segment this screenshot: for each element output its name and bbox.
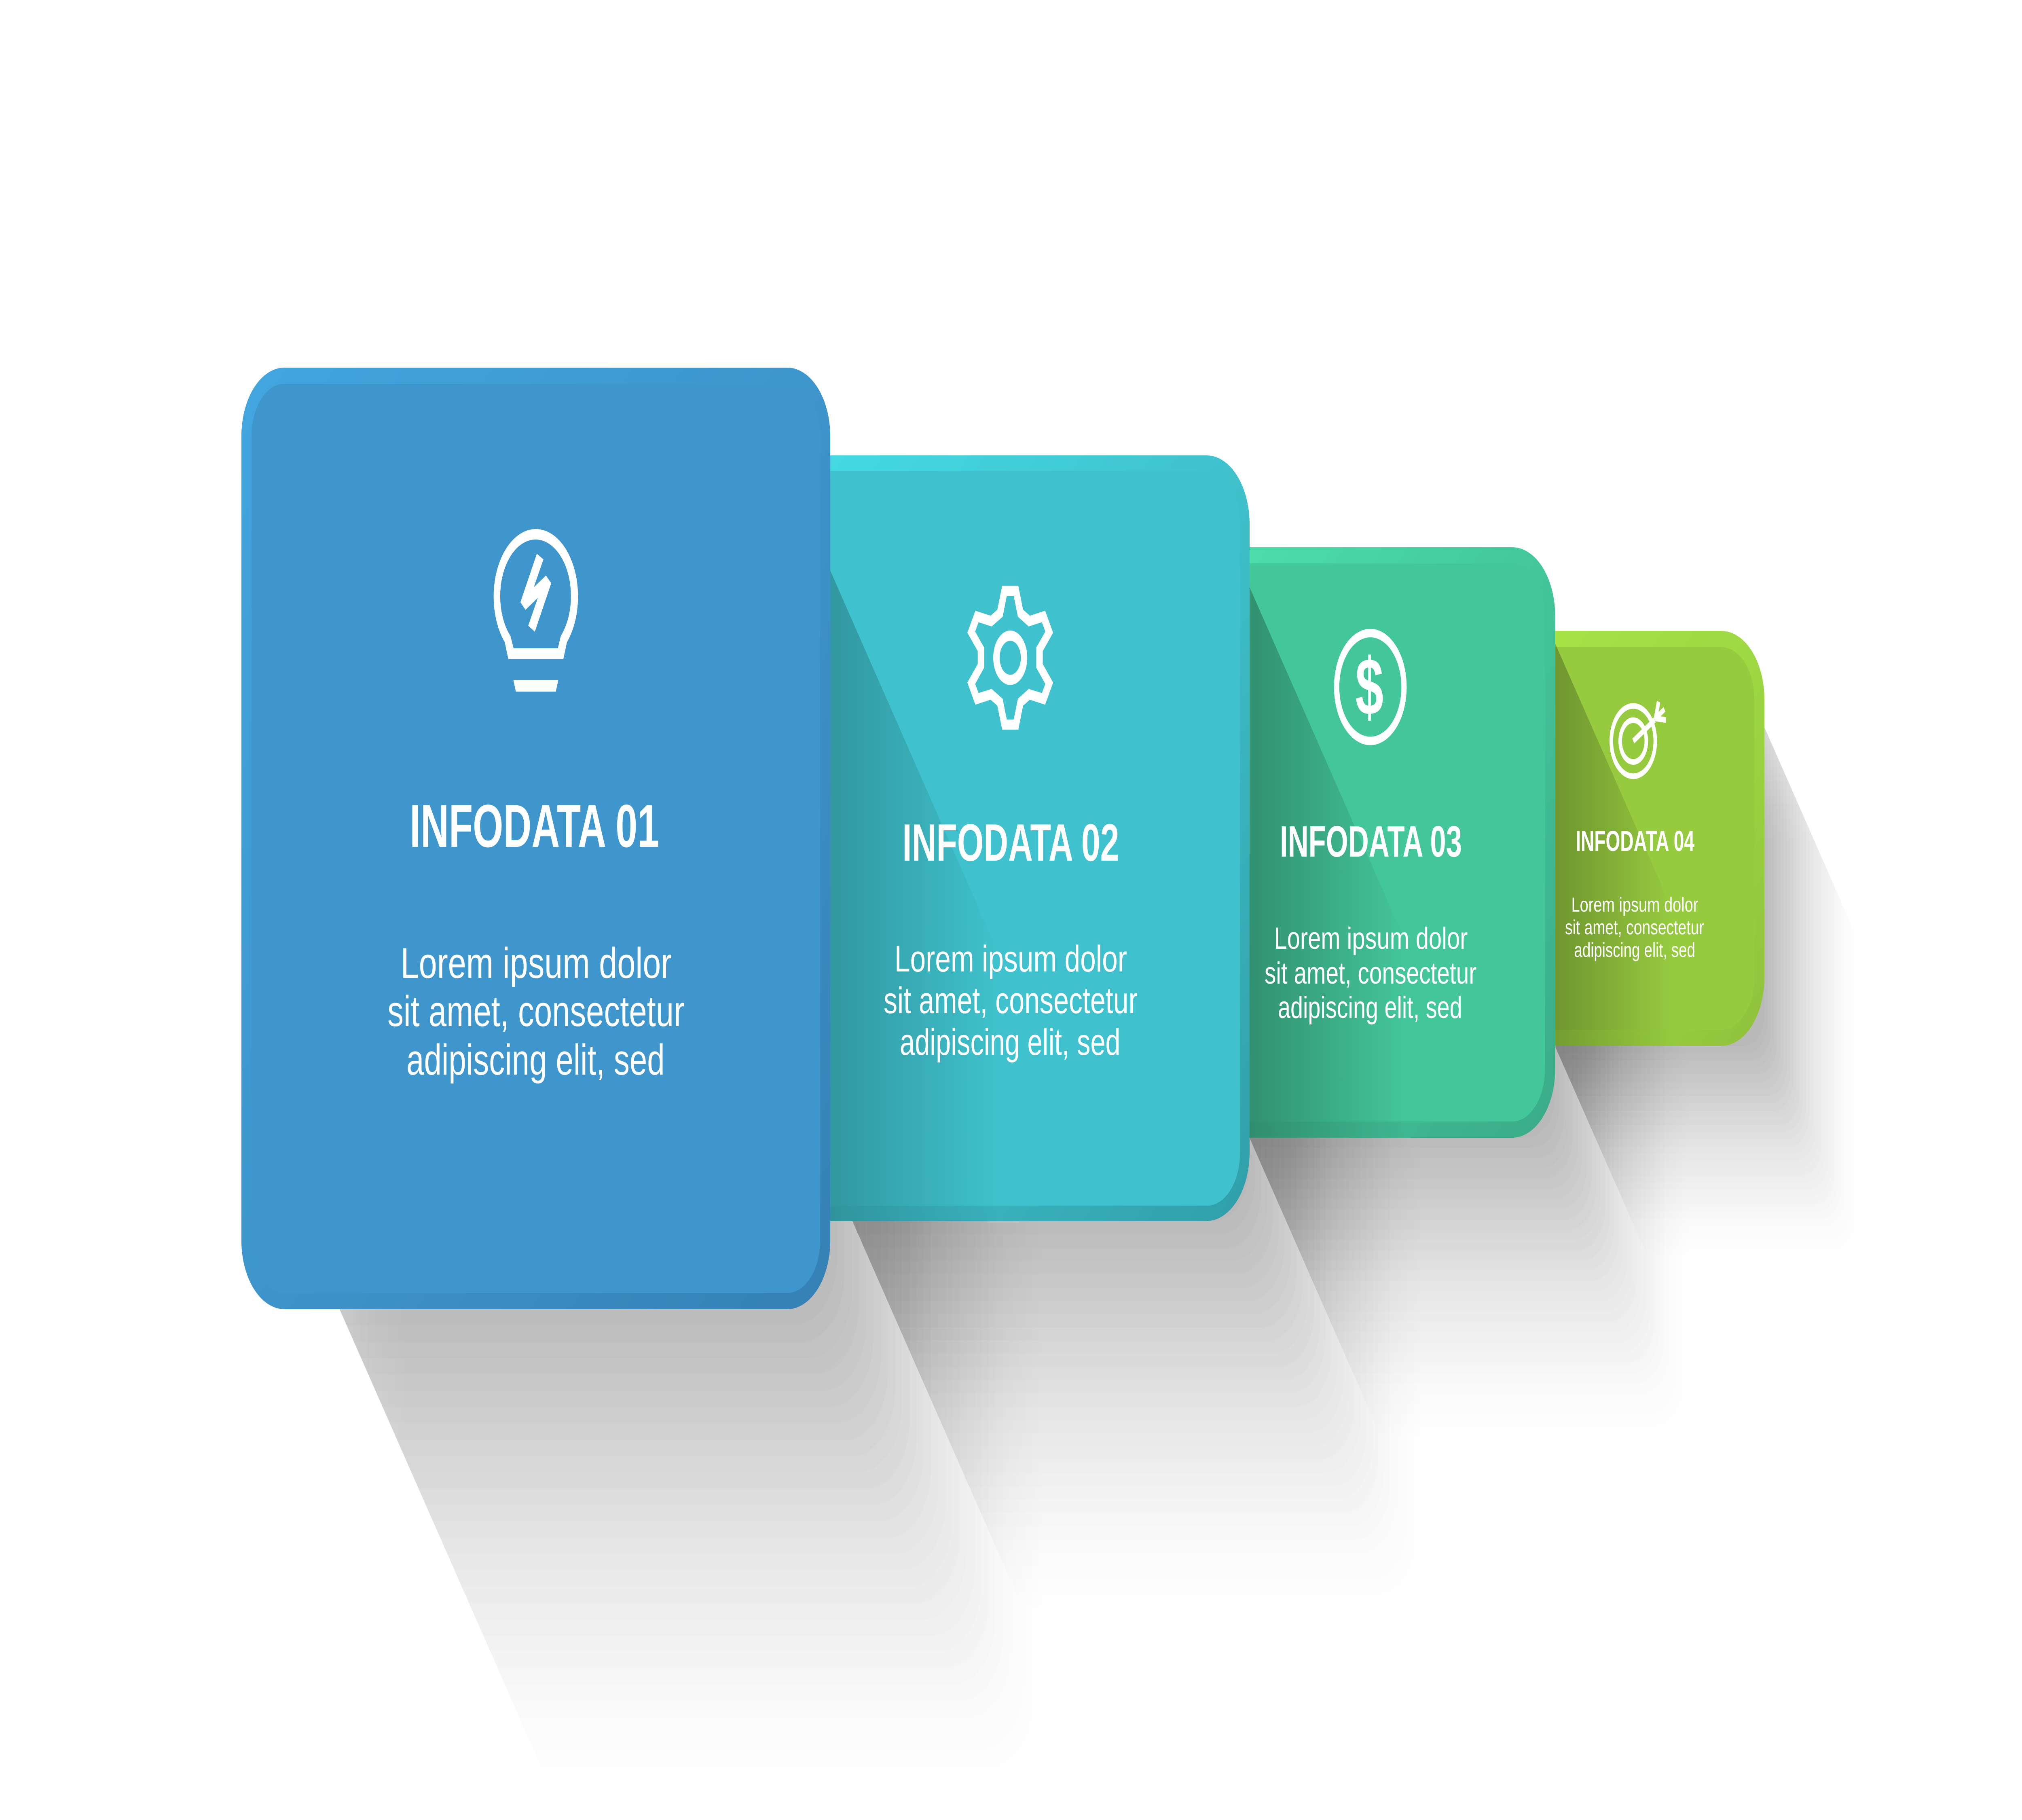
text block: card 3 body: Lorem ipsum dolor	[1274, 922, 1468, 956]
icon: dollar coin	[1337, 633, 1404, 741]
heading: infodata 01: INFODATA 01	[410, 792, 659, 860]
long shadow: card 4	[1555, 727, 1838, 1211]
icon: target with arrow	[1611, 701, 1666, 776]
long shadow: card 3	[1250, 1046, 1659, 1373]
text block: card 1 body: sit amet, consectetur	[387, 987, 684, 1035]
panel: card 2	[771, 455, 1250, 1221]
text block: card 1 body	[387, 939, 684, 1084]
text block: card 3 body: sit amet, consectetur	[1265, 957, 1476, 990]
card 3 face	[1195, 563, 1545, 1122]
text block: card 4 body	[1565, 893, 1704, 961]
cast shadow from card 3	[1555, 643, 1732, 1046]
cast shadow from card 1	[830, 571, 1117, 1221]
panel: card 4	[1504, 631, 1764, 1046]
text block: card 2 body	[884, 938, 1138, 1063]
icon: dollar coin: $	[1355, 642, 1383, 732]
card 2 bevel	[771, 455, 1250, 1221]
heading: infodata 04: INFODATA 04	[1576, 825, 1694, 857]
panel: card 1	[241, 368, 830, 1309]
card 4 bevel	[1504, 631, 1764, 1046]
heading: infodata 03: INFODATA 03	[1280, 817, 1462, 866]
text block: card 4 body: Lorem ipsum dolor	[1571, 893, 1698, 916]
text block: card 1 body: Lorem ipsum dolor	[401, 939, 672, 987]
card 4 face	[1514, 647, 1754, 1030]
icon: gear	[967, 586, 1053, 730]
text block: card 1 body: adipiscing elit, sed	[406, 1035, 665, 1084]
icon: light bulb	[494, 529, 578, 692]
card 1 bevel	[241, 368, 830, 1309]
heading: infodata 02: INFODATA 02	[902, 813, 1119, 872]
text block: card 4 body: adipiscing elit, sed	[1574, 938, 1695, 961]
card 2 face	[781, 471, 1240, 1206]
text block: card 3 body: adipiscing elit, sed	[1278, 991, 1462, 1025]
text block: card 2 body: adipiscing elit, sed	[900, 1022, 1121, 1063]
cast shadow from card 2	[1250, 587, 1492, 1138]
text block: card 2 body: Lorem ipsum dolor	[895, 938, 1127, 980]
card 1 face	[252, 384, 820, 1293]
long shadow: card 2	[852, 1138, 1384, 1526]
panel: card 3	[1184, 547, 1555, 1138]
text block: card 3 body	[1265, 922, 1476, 1025]
text block: card 4 body: sit amet, consectetur	[1565, 916, 1704, 939]
card 3 bevel	[1184, 547, 1555, 1138]
long shadow: card 1	[340, 1221, 996, 1685]
text block: card 2 body: sit amet, consectetur	[884, 980, 1138, 1021]
